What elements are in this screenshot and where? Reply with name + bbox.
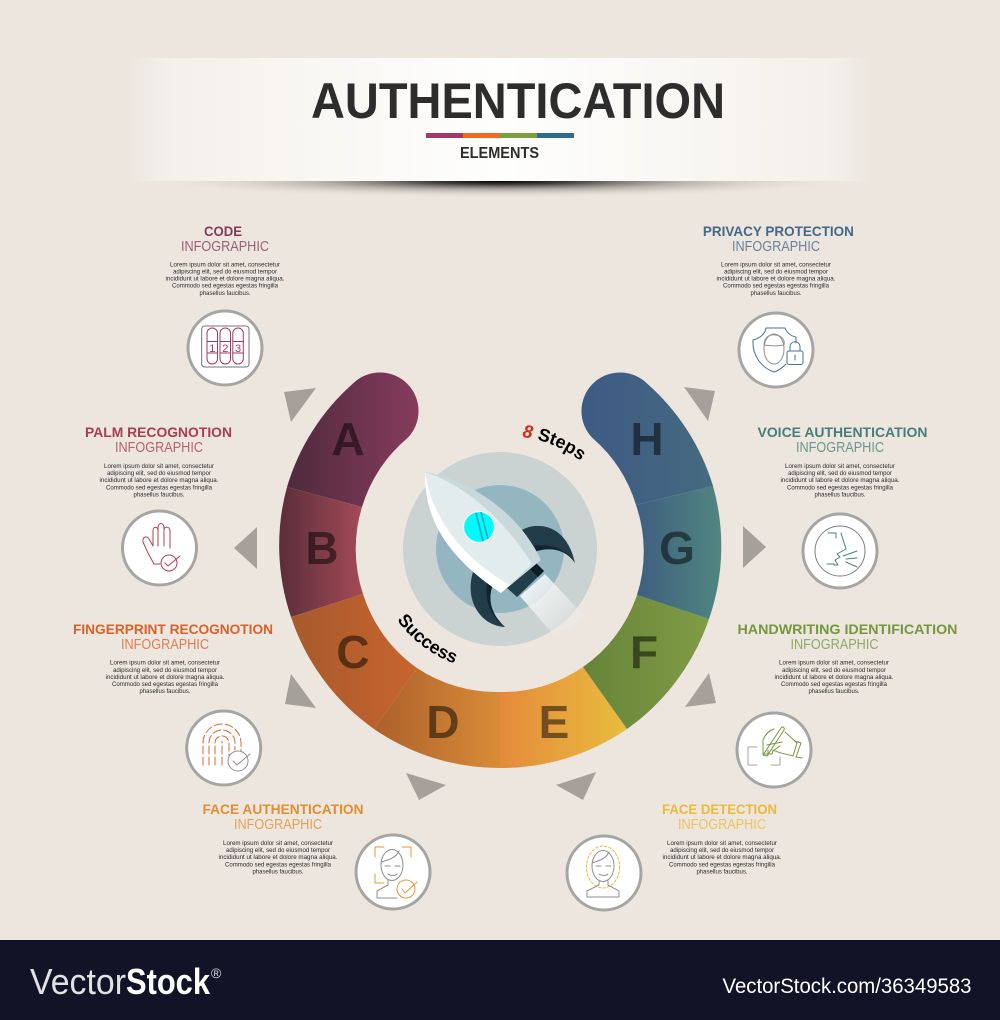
- letter D: D: [426, 696, 460, 748]
- body text: adipiscing elit, sed do eiusmod tempor: [173, 268, 277, 276]
- arrow lower right: [685, 673, 716, 707]
- segment E: [500, 667, 627, 768]
- heading: PRIVACY PROTECTION: [703, 223, 854, 239]
- segment B: [279, 487, 363, 617]
- panel: voice authentication: [758, 424, 928, 588]
- arrow left: [234, 527, 257, 569]
- direction arrows: [234, 387, 766, 800]
- segment A: [287, 372, 419, 507]
- body text: adipiscing elit, sed do eiusmod tempor: [107, 470, 211, 477]
- arrow top right: [684, 387, 715, 421]
- body text: incididunt ut labore et dolore magna aliqua.: [106, 674, 225, 681]
- body white side: [425, 472, 510, 593]
- heading: VOICE AUTHENTICATION: [758, 424, 928, 440]
- panel: face authentication: [202, 801, 430, 909]
- icon: privacy shield: [739, 313, 813, 387]
- outer disc: [403, 452, 597, 646]
- curved label: Success: Success: [398, 614, 456, 662]
- panel: fingerprint recognition: [73, 621, 273, 785]
- subtitle: ELEMENTS: [460, 145, 539, 162]
- heading: PALM RECOGNOTION: [85, 424, 232, 440]
- title banner: [130, 58, 870, 198]
- body text: Commodo sed egestas egestas fringilla: [172, 283, 278, 290]
- icon: code lock: 2: [222, 343, 228, 355]
- icon: code lock: 1: [209, 343, 215, 355]
- body text: [218, 840, 338, 875]
- body text: phasellus faucibus.: [750, 290, 802, 297]
- body text: [780, 463, 900, 498]
- segment C: [291, 594, 417, 729]
- body text: Lorem ipsum dolor sit amet, consectetur: [667, 840, 777, 847]
- body text: Commodo sed egestas egestas fringilla: [225, 861, 331, 868]
- subheading: INFOGRAPHIC: [121, 637, 209, 653]
- title: AUTHENTICATION: [311, 73, 725, 129]
- rocket body: [425, 472, 541, 593]
- body text: phasellus faucibus.: [696, 868, 748, 875]
- subheading: INFOGRAPHIC: [234, 817, 322, 833]
- letter G: G: [659, 522, 695, 574]
- panel: palm recognition: [85, 424, 232, 585]
- logo: ®: [211, 965, 222, 981]
- body text: Commodo sed egestas egestas fringilla: [106, 484, 212, 491]
- body text: incididunt ut labore et dolore magna aliqua.: [774, 674, 894, 681]
- subheading: INFOGRAPHIC: [115, 440, 203, 456]
- icon: fingerprint: [187, 711, 261, 785]
- body text: incididunt ut labore et dolore magna aliqua.: [218, 854, 338, 861]
- body text: phasellus faucibus.: [200, 290, 251, 297]
- body text: adipiscing elit, sed do eiusmod tempor: [724, 268, 828, 276]
- letter A: A: [331, 413, 365, 465]
- banner panel: [130, 58, 870, 181]
- panel: face detection: [567, 801, 782, 910]
- heading: FACE AUTHENTICATION: [202, 801, 364, 817]
- icon: code lock: 3: [235, 343, 241, 355]
- body text: Commodo sed egestas egestas fringilla: [669, 861, 775, 868]
- footer bar: [0, 940, 1000, 1020]
- body text: Lorem ipsum dolor sit amet, consectetur: [104, 463, 214, 470]
- body text: Commodo sed egestas egestas fringilla: [787, 484, 893, 491]
- inner disc: [436, 485, 564, 613]
- letter C: C: [336, 626, 370, 678]
- icon: face scan: [356, 835, 430, 909]
- subheading: INFOGRAPHIC: [732, 239, 820, 255]
- panel: privacy protection: [703, 223, 854, 387]
- porthole: [464, 512, 494, 542]
- arrow right: [743, 526, 766, 568]
- body light side: [425, 472, 532, 593]
- panel: handwriting identification: [737, 621, 958, 787]
- porthole stripes: [476, 512, 488, 541]
- body text: Lorem ipsum dolor sit amet, consectetur: [110, 660, 220, 667]
- body text: Commodo sed egestas egestas fringilla: [112, 681, 218, 688]
- flame: [520, 574, 588, 634]
- arrow bottom left: [406, 773, 446, 800]
- body text: incididunt ut labore et dolore magna aliqua.: [780, 477, 900, 484]
- body text: [716, 261, 836, 297]
- icon: face detection: [567, 836, 641, 910]
- logo: [30, 961, 222, 1002]
- body text: Lorem ipsum dolor sit amet, consectetur: [779, 660, 889, 667]
- rocket illustration: [403, 452, 597, 646]
- body text: Lorem ipsum dolor sit amet, consectetur: [785, 463, 895, 470]
- segment F: [583, 595, 709, 729]
- lower fin shading: [487, 579, 505, 627]
- body text: Lorem ipsum dolor sit amet, consectetur: [170, 261, 280, 268]
- body text: phasellus faucibus.: [814, 491, 866, 498]
- heading: FACE DETECTION: [662, 801, 777, 817]
- icon: palm: [122, 511, 196, 585]
- icon: voice: [803, 514, 877, 588]
- image id: VectorStock.com/36349583: [722, 975, 972, 998]
- body text: phasellus faucibus.: [808, 688, 860, 695]
- panel: code: [166, 223, 285, 385]
- body text: [774, 660, 894, 695]
- body text: adipiscing elit, sed do eiusmod tempor: [788, 470, 892, 477]
- upper fin: [522, 526, 575, 563]
- body text: [166, 261, 285, 297]
- ring chart: [279, 372, 721, 768]
- heading: CODE: [204, 223, 242, 239]
- body text: [106, 660, 225, 695]
- body text: phasellus faucibus.: [140, 688, 191, 695]
- body text: adipiscing elit, sed do eiusmod tempor: [670, 847, 774, 854]
- body text: incididunt ut labore et dolore magna aliqua.: [716, 276, 836, 283]
- subheading: INFOGRAPHIC: [678, 817, 766, 833]
- subheading: INFOGRAPHIC: [796, 440, 884, 456]
- body text: adipiscing elit, sed do eiusmod tempor: [113, 667, 217, 674]
- letter B: B: [305, 522, 339, 574]
- body text: Lorem ipsum dolor sit amet, consectetur: [721, 261, 831, 268]
- icon: handwriting: [737, 713, 811, 787]
- segment D: [374, 668, 500, 768]
- curved label: 8 Steps: 8 Steps: [522, 425, 584, 460]
- body text: incididunt ut labore et dolore magna aliqua.: [166, 276, 285, 283]
- body text: Commodo sed egestas egestas fringilla: [781, 681, 887, 688]
- body text: Commodo sed egestas egestas fringilla: [723, 283, 829, 290]
- colour bar: [426, 133, 574, 138]
- arrow bottom right: [556, 772, 596, 800]
- letter H: H: [630, 413, 664, 465]
- lower fin: [471, 572, 505, 627]
- segment H: [581, 372, 713, 505]
- nozzle: [507, 562, 544, 597]
- body text: incididunt ut labore et dolore magna aliqua.: [662, 854, 782, 861]
- subheading: INFOGRAPHIC: [181, 239, 269, 255]
- body text: [662, 840, 782, 875]
- body text: phasellus faucibus.: [134, 491, 185, 498]
- heading: HANDWRITING IDENTIFICATION: [738, 621, 958, 637]
- body text: adipiscing elit, sed do eiusmod tempor: [226, 847, 330, 854]
- arrow top left: [284, 388, 316, 422]
- body text: adipiscing elit, sed do eiusmod tempor: [782, 667, 886, 674]
- heading: FINGERPRINT RECOGNOTION: [73, 621, 273, 637]
- logo: Vector: [30, 961, 126, 1002]
- body text: [100, 463, 219, 498]
- icon: code lock: [188, 311, 262, 385]
- banner shadow: [150, 181, 850, 198]
- logo: Stock: [126, 961, 211, 1002]
- letter F: F: [630, 626, 658, 678]
- body text: Lorem ipsum dolor sit amet, consectetur: [223, 840, 333, 847]
- segment G: [636, 486, 721, 619]
- body text: incididunt ut labore et dolore magna aliqua.: [100, 477, 219, 484]
- subheading: INFOGRAPHIC: [790, 637, 878, 653]
- upper fin shading: [530, 545, 575, 563]
- nozzle shade: [529, 562, 544, 577]
- body text: phasellus faucibus.: [252, 868, 304, 875]
- arrow lower left: [285, 674, 316, 708]
- letter E: E: [539, 696, 569, 748]
